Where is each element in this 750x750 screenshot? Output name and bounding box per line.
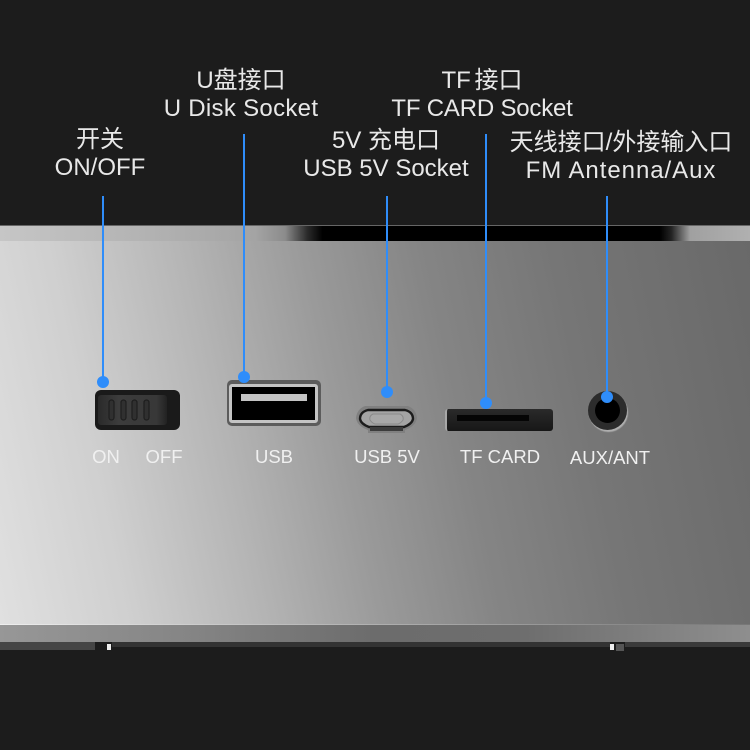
dot: AUX [601,391,613,403]
heading: 5V: USB 5V Socket [303,155,469,182]
heading: USB: U Disk Socket [164,95,318,122]
top bevel band [0,225,750,241]
callout lines and dots [97,134,613,409]
foot marker left [107,644,111,650]
USB inner frame [229,384,318,423]
label USB: USB [255,446,293,467]
port labels [92,446,650,468]
line: AUX [606,196,608,396]
heading: USB: U盘接口 [196,67,286,94]
base strip right [625,642,750,647]
dot: 5V [381,386,393,398]
line: TF [485,134,487,402]
base strip centre [112,642,610,647]
heading: AUX [510,129,732,184]
switch slider [98,395,167,425]
AUX jack [588,391,627,430]
bottom bevel band [0,625,750,642]
base strip left [0,642,95,650]
USB port [227,380,321,426]
heading: TF: TF 接口 [441,67,522,94]
heading: AUX: 天线接口/外接输入口 [510,129,732,156]
heading: TF [391,67,573,122]
AUX hole [595,398,620,423]
label AUX/ANT: AUX/ANT [570,447,650,468]
dot: switch [97,376,109,388]
heading: switch: ON/OFF [55,154,145,181]
heading: 5V: 5V 充电口 [332,127,440,154]
heading: USB [164,67,318,122]
label ON: ON [92,446,120,467]
label USB 5V: USB 5V [354,446,420,467]
foot block right [616,644,624,651]
USB tongue [241,394,307,401]
label OFF: OFF [146,446,182,467]
dot: TF [480,397,492,409]
bottom highlight [0,624,750,625]
heading: TF: TF CARD Socket [391,95,573,122]
heading: AUX: FM Antenna/Aux [526,157,716,184]
TF slot opening [457,415,529,421]
heading: switch: 开关 [76,126,124,153]
line: USB [243,134,245,377]
micro USB port [356,406,417,433]
switch [95,390,180,430]
line: 5V [386,196,388,392]
dot: USB [238,371,250,383]
line: switch [102,196,104,382]
speaker body [0,225,750,651]
foot marker right [610,644,614,650]
TF card slot [445,409,553,431]
label TF CARD: TF CARD [460,446,540,467]
front face [0,241,750,624]
heading: 5V [303,127,469,182]
switch ridges [108,400,150,420]
heading: switch [55,126,145,181]
